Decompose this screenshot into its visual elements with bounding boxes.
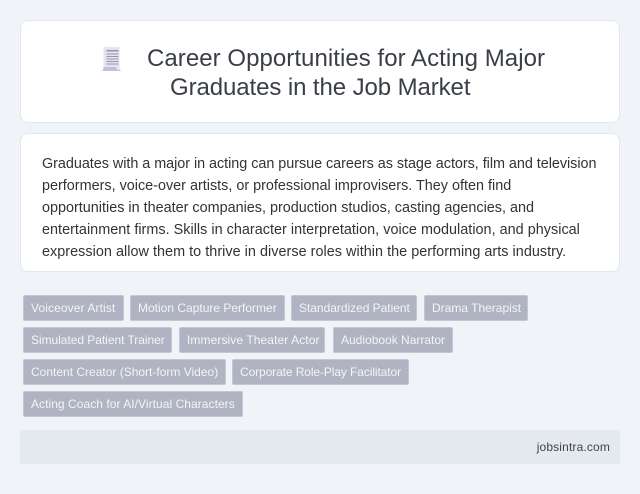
- description text: expression allow them to thrive in diverse roles within the performing arts industry.: [42, 244, 566, 260]
- tag: Audiobook Narrator: [333, 327, 453, 353]
- tag: Voiceover Artist: [23, 295, 124, 321]
- tag: Acting Coach: Acting Coach for AI/Virtual Characters: [31, 397, 235, 411]
- icon: document scroll: [101, 46, 120, 71]
- tag: Content Creator: [23, 359, 226, 385]
- tag: Corporate Role-Play Facilitator: [232, 359, 409, 385]
- description text: [42, 156, 596, 260]
- description text: opportunities in theater companies, production studios, casting agencies, and: [42, 200, 534, 216]
- tag: Motion Capture Performer: [130, 295, 285, 321]
- tag: Corporate Role-Play Facilitator: Corporate Role-Play Facilitator: [240, 365, 401, 379]
- tag: Drama Therapist: [424, 295, 528, 321]
- description text: Graduates with a major in acting can pursue careers as stage actors, film and television: [42, 156, 596, 172]
- tag: Motion Capture Performer: Motion Capture Performer: [138, 301, 277, 315]
- tag: Standardized Patient: [291, 295, 417, 321]
- tag: Drama Therapist: Drama Therapist: [432, 301, 521, 315]
- tag: Content Creator: Content Creator (Short-form Video): [31, 365, 218, 379]
- tag: Simulated Patient Trainer: Simulated Patient Trainer: [31, 333, 165, 347]
- tag: Voiceover Artist: Voiceover Artist: [31, 301, 115, 315]
- tag: Immersive Theater Actor: [179, 327, 325, 353]
- description text: entertainment firms. Skills in character interpretation, voice modulation, and physical: [42, 222, 580, 238]
- tag: Simulated Patient Trainer: [23, 327, 172, 353]
- title line 2: Graduates in the Job Market: [170, 74, 470, 101]
- tag: Audiobook Narrator: Audiobook Narrator: [341, 333, 445, 347]
- panel: description card: [20, 133, 620, 272]
- tag: Acting Coach: [23, 391, 243, 417]
- tag: Standardized Patient: Standardized Patient: [299, 301, 410, 315]
- panel: title card: [20, 20, 620, 123]
- description text: performers, voice-over artists, or professional improvisers. They often find: [42, 178, 511, 194]
- title line 1: Career Opportunities for Acting Major: [147, 45, 545, 72]
- tag: Immersive Theater Actor: Immersive Theater Actor: [187, 333, 320, 347]
- footer bar: [20, 430, 620, 464]
- panel: job tags: [23, 295, 528, 417]
- footer text: jobsintra.com: [537, 440, 610, 454]
